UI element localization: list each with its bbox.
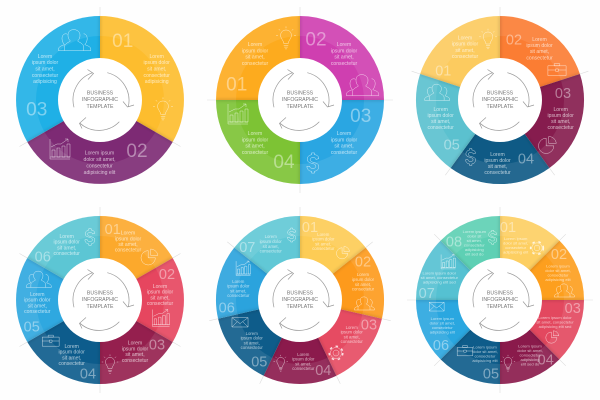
text block 02: sit amet,: [355, 282, 371, 287]
number 06: 06: [219, 300, 235, 316]
text block 08: elit sed do: [465, 252, 484, 256]
text block 03: sit amet, consectetur: [536, 319, 574, 324]
icon: briefcase: [457, 346, 473, 356]
text block 03: adipisicing: [33, 79, 57, 85]
text block 01: consectetur: [505, 245, 527, 250]
text block 02: Lorem ipsum: [85, 150, 114, 156]
segment 05 teal: [416, 74, 500, 168]
text block 04: sit amet,: [245, 144, 265, 150]
text block 01: sit amet,: [118, 242, 138, 248]
icon: people: [26, 271, 51, 287]
text block 08: consectetur: [464, 242, 485, 248]
icon: bar chart: [236, 261, 250, 276]
segment 02 orange: [500, 241, 584, 300]
text block 05: Lorem: [433, 107, 448, 113]
icon: dollar: [307, 153, 319, 173]
text block 05: adipisicing elit: [472, 358, 498, 363]
hub title: BUSINESS: [87, 91, 114, 97]
text block 01: sit amet,: [315, 241, 331, 246]
number 07: 07: [419, 286, 435, 302]
text block 03: ipsum dolor: [548, 113, 574, 119]
text block 02: consectetur: [331, 61, 357, 67]
segment 01 yellow: [300, 216, 366, 300]
text block 05: sit amet,: [244, 340, 260, 345]
text block 02: Lorem: [357, 272, 370, 277]
text block 06: consectetur: [432, 325, 453, 330]
text block 03: Lorem ipsum dolor: [538, 315, 572, 320]
text block 05: consectetur: [24, 309, 51, 315]
text block 03: sit amet,: [125, 352, 145, 358]
text block 02: consectetur: [526, 55, 553, 61]
text block 05: consectetur: [428, 125, 454, 131]
number 05: 05: [444, 138, 460, 154]
icon: people: [346, 75, 379, 96]
cycle arrows: [473, 70, 534, 130]
hub title: BUSINESS: [487, 91, 514, 97]
text block 03: consectetur: [331, 150, 357, 156]
text block 04: consectetur: [59, 361, 85, 367]
text block 04: elit sed do: [521, 361, 540, 366]
text block 08: sit amet,: [467, 238, 482, 243]
text block 03: consectetur: [32, 73, 58, 79]
hub title: INFOGRAPHIC: [482, 97, 518, 103]
icon: light bulb: [276, 26, 296, 49]
center hub: [58, 58, 142, 142]
icon: people: [554, 284, 574, 297]
segment 05 navy: [218, 300, 300, 376]
text block 02: Lorem: [153, 284, 167, 290]
text block 04: Lorem: [64, 344, 79, 350]
text block 07: Lorem ipsum dolor: [423, 270, 457, 275]
panel: five-step wheel: [412, 7, 588, 184]
text block 04: ipsum dolor: [484, 158, 511, 164]
icon: gear: [329, 346, 343, 360]
segment 02 purple: [27, 100, 173, 184]
hub title: BUSINESS: [287, 291, 314, 297]
text block 02: sit amet,: [150, 295, 170, 301]
text block 03: sit amet,: [551, 119, 570, 125]
cycle arrows: [73, 270, 134, 330]
text block 06: Lorem ipsum: [431, 316, 455, 321]
text block 04: Lorem: [248, 131, 262, 137]
icon: bar chart: [50, 139, 70, 159]
text block 06: ipsum dolor: [227, 284, 250, 289]
text block 01: consectetur: [452, 54, 478, 60]
icon: light bulb: [479, 29, 497, 49]
icon: people: [425, 84, 450, 100]
text block 03: Lorem: [553, 107, 568, 113]
text block 03: ipsum dolor: [32, 60, 58, 66]
number 02: 02: [126, 141, 148, 162]
text block 02: Lorem ipsum: [546, 264, 570, 268]
number 04: 04: [518, 152, 534, 168]
number 02: 02: [355, 254, 371, 270]
hub title: BUSINESS: [287, 91, 314, 97]
text block 01: sit amet,: [455, 48, 475, 54]
text block 03: ipsum dolor: [341, 330, 363, 335]
text block 04: sit amet,: [295, 361, 311, 366]
segment 01 orange: [216, 16, 300, 100]
number 02: 02: [159, 267, 175, 283]
text block 01: ipsum dolor: [312, 237, 335, 242]
number 08: 08: [446, 234, 462, 250]
center hub: [58, 258, 142, 342]
number 04: 04: [80, 366, 96, 382]
hub title: BUSINESS: [87, 291, 114, 297]
text block 06: sit amet,: [57, 245, 76, 251]
text block 03: ipsum dolor: [122, 346, 148, 352]
text block 01: ipsum dolor: [144, 60, 170, 66]
cycle arrows: [273, 70, 334, 130]
center hub: [258, 58, 342, 142]
center hub: [458, 58, 542, 142]
icon: bar chart: [441, 254, 456, 269]
text block 06: consectetur: [227, 293, 250, 298]
icon: pie chart: [546, 331, 559, 343]
icon: people: [354, 297, 374, 310]
text block 03: Lorem: [128, 340, 142, 346]
number 02: 02: [305, 30, 327, 50]
text block 02: dolor sit amet,: [545, 268, 571, 273]
icon: light bulb: [501, 355, 515, 371]
text block 02: ipsum dolor: [331, 48, 357, 54]
text block 01: consectetur: [242, 61, 268, 67]
text block 03: sit amet,: [35, 66, 55, 72]
center hub: [258, 258, 342, 342]
text block 01: ipsum dolor: [452, 42, 478, 48]
text block 06: Lorem: [59, 234, 74, 240]
icon: pie chart: [336, 246, 350, 259]
text block 01: Lorem: [121, 230, 135, 236]
hub title: TEMPLATE: [286, 304, 314, 310]
text block 02: Lorem: [532, 37, 547, 43]
text block 04: sit amet,: [488, 164, 507, 170]
segment 02 red: [100, 258, 184, 342]
text block 03: Lorem: [38, 54, 52, 60]
text block 02: sit amet,: [334, 55, 354, 61]
text block 06: adipisicing elit: [430, 329, 456, 334]
number 06: 06: [433, 338, 449, 354]
text block 01: consectetur: [144, 73, 170, 79]
center hub: [458, 258, 542, 342]
hub title: TEMPLATE: [286, 104, 314, 110]
panel: three-step wheel: [16, 7, 184, 184]
text block 07: adipisicing elit sed: [423, 279, 456, 284]
icon: light bulb: [274, 355, 288, 371]
text block 01: Lorem: [149, 54, 164, 60]
text block 05: sit amet,: [28, 303, 47, 309]
hub title: INFOGRAPHIC: [282, 297, 318, 303]
text block 07: sit amet, consectetur: [421, 275, 459, 280]
icon: light bulb: [102, 354, 118, 373]
text block 01: adipisicing elit: [503, 249, 529, 254]
text block 08: dolor sit: [467, 234, 482, 238]
text block 03: adipisicing elit sed: [539, 324, 571, 329]
segment 08 mint: [441, 216, 500, 300]
number 03: 03: [565, 301, 581, 317]
text block 01: sit amet,: [245, 55, 265, 61]
text block 02: ipsum dolor: [526, 43, 553, 49]
text block 06: sit amet,: [230, 288, 246, 293]
text block 05: ipsum dolor: [241, 336, 263, 341]
text block 04: dolor sit amet,: [517, 348, 543, 353]
panel: six-step wheel: [16, 207, 184, 393]
segment 03 red: [300, 300, 382, 376]
number 05: 05: [24, 320, 40, 336]
segment 07 teal: [234, 216, 300, 300]
icon: pie chart: [141, 249, 158, 265]
segment 02 magenta: [300, 16, 384, 100]
text block 03: Lorem: [337, 131, 351, 137]
text block 02: Lorem: [337, 42, 351, 48]
icon: bar chart: [152, 310, 170, 326]
number 02: 02: [506, 32, 522, 48]
number 01: 01: [226, 74, 247, 96]
segment 06 blue: [216, 248, 300, 319]
text block 02: ipsum dolor: [147, 290, 173, 296]
text block 04: Lorem: [490, 152, 505, 158]
icon: dollar: [85, 229, 95, 245]
segment 03 blue: [16, 16, 100, 142]
icon: bar chart: [228, 104, 248, 124]
text block 02: sit amet,: [530, 49, 549, 55]
text block 07: Lorem: [265, 234, 277, 239]
text block 04: ipsum dolor: [242, 137, 268, 143]
icon: dollar: [466, 149, 476, 165]
text block 04: Lorem: [297, 352, 310, 357]
text block 05: ipsum dolor: [428, 113, 454, 119]
text block 04: consectetur: [242, 150, 268, 156]
text block 05: Lorem ipsum: [473, 344, 497, 349]
text block 01: adipisicing: [145, 79, 169, 85]
segment 04 maroon: [500, 300, 559, 384]
number 03: 03: [361, 318, 377, 334]
icon: briefcase: [42, 335, 59, 346]
text block 02: adipisicing elit: [545, 277, 571, 282]
cycle arrows: [73, 70, 134, 130]
hub title: INFOGRAPHIC: [282, 97, 318, 103]
text block 05: Lorem: [246, 331, 258, 336]
segment 01 orange: [100, 216, 173, 300]
text block 02: adipisicing elit: [84, 170, 116, 176]
number 03: 03: [350, 106, 371, 127]
icon: people: [58, 30, 91, 51]
text block 06: dolor sit amet,: [430, 320, 455, 325]
text block 06: Lorem: [232, 279, 245, 284]
hub title: INFOGRAPHIC: [82, 97, 118, 103]
text block 03: consectetur: [122, 358, 148, 364]
number 06: 06: [35, 250, 51, 266]
panel: four-step wheel: [207, 7, 393, 193]
hub title: TEMPLATE: [486, 104, 514, 110]
segment 01 yellow: [100, 16, 184, 142]
number 01: 01: [435, 64, 451, 80]
text block 02: consectetur: [352, 287, 375, 292]
number 01: 01: [112, 31, 133, 52]
segment 02 orange: [300, 248, 384, 319]
hub title: INFOGRAPHIC: [482, 297, 518, 303]
number 01: 01: [500, 220, 516, 236]
text block 03: consectetur: [548, 125, 574, 131]
number 01: 01: [105, 222, 121, 238]
hub title: TEMPLATE: [86, 304, 114, 310]
text block 03: sit amet,: [334, 144, 354, 150]
number 07: 07: [239, 240, 255, 256]
text block 07: sit amet,: [263, 244, 279, 249]
number 03: 03: [149, 338, 165, 354]
segment 06 blue: [416, 300, 500, 359]
icon: light bulb: [153, 97, 173, 120]
segment 03 maroon: [100, 300, 173, 384]
hub title: INFOGRAPHIC: [82, 297, 118, 303]
segment 05 blue: [16, 258, 100, 342]
icon: dollar: [488, 230, 497, 244]
text block 04: adipisicing: [521, 357, 539, 362]
text block 04: ipsum dolor: [292, 357, 315, 362]
text block 01: dolor sit amet,: [503, 240, 528, 245]
number 05: 05: [251, 354, 267, 370]
text block 07: ipsum dolor: [260, 239, 282, 244]
number 04: 04: [538, 352, 554, 368]
text block 05: consectetur: [241, 345, 263, 350]
number 03: 03: [26, 100, 47, 120]
segment 03 blue: [300, 100, 384, 184]
text block 01: Lorem: [317, 232, 330, 237]
hub title: BUSINESS: [487, 291, 514, 297]
hub title: TEMPLATE: [86, 104, 114, 110]
text block 01: sit amet,: [147, 66, 166, 72]
text block 03: consectetur: [341, 339, 363, 344]
text block 01: Lorem: [458, 36, 472, 42]
text block 08: adipisicing: [465, 247, 484, 252]
text block 04: Lorem ipsum: [518, 343, 542, 348]
number 04: 04: [273, 152, 295, 173]
icon: envelope: [232, 318, 248, 327]
text block 04: consectetur: [292, 366, 315, 371]
text block 04: consectetur: [520, 352, 541, 357]
text block 05: sit amet,: [431, 119, 450, 125]
text block 02: ipsum dolor: [352, 277, 375, 282]
text block 05: dolor sit amet,: [472, 349, 498, 354]
text block 01: ipsum dolor: [115, 236, 141, 242]
icon: pie chart: [538, 136, 556, 154]
text block 04: ipsum dolor: [59, 350, 85, 356]
segment 01 yellow: [420, 16, 500, 100]
text block 05: ipsum dolor: [24, 298, 51, 304]
number 02: 02: [551, 247, 567, 263]
panel: seven-step wheel: [209, 207, 391, 384]
text block 03: ipsum dolor: [331, 137, 357, 143]
text block 04: consectetur: [484, 170, 511, 176]
text block 06: ipsum dolor: [54, 240, 80, 246]
icon: briefcase: [548, 64, 566, 76]
cycle arrows: [473, 270, 534, 330]
segment 03 red: [500, 300, 584, 359]
hub title: TEMPLATE: [486, 304, 514, 310]
segment 04 navy: [451, 100, 549, 184]
text block 01: consectetur: [312, 246, 335, 251]
text block 07: consectetur: [260, 249, 282, 254]
text block 01: Lorem: [248, 42, 262, 48]
segment 04 maroon: [264, 300, 336, 384]
text block 02: consectetur: [147, 301, 173, 307]
text block 04: sit amet,: [62, 355, 81, 361]
segment 05 navy: [441, 300, 500, 384]
text block 08: Lorem ipsum: [463, 229, 487, 234]
text block 03: sit amet,: [344, 334, 360, 339]
text block 06: consectetur: [54, 251, 80, 257]
number 05: 05: [483, 366, 499, 382]
icon: gear: [531, 242, 543, 254]
panel: eight-step wheel: [407, 207, 593, 393]
segment 03 maroon: [500, 74, 584, 168]
text block 01: consectetur: [115, 248, 141, 254]
number 03: 03: [555, 86, 571, 102]
text block 05: Lorem: [30, 292, 45, 298]
text block 01: ipsum dolor: [242, 48, 268, 54]
text block 02: consectetur: [86, 164, 113, 170]
icon: envelope: [429, 302, 444, 311]
text block 02: consectetur: [548, 272, 569, 278]
text block 05: consectetur: [475, 353, 496, 358]
number 04: 04: [315, 363, 331, 379]
segment 04 green: [216, 100, 300, 184]
segment 04 navy: [27, 300, 100, 384]
segment 02 orange: [500, 16, 580, 100]
text block 01: Lorem ipsum: [504, 236, 528, 241]
icon: dollar: [287, 228, 296, 242]
segment 07 teal blue: [416, 241, 500, 300]
text block 02: dolor sit amet,: [84, 157, 116, 163]
text block 03: Lorem: [346, 325, 358, 330]
segment 06 teal: [27, 216, 100, 300]
segment 01 yellow: [500, 216, 559, 300]
number 01: 01: [302, 220, 318, 236]
cycle arrows: [273, 270, 334, 330]
